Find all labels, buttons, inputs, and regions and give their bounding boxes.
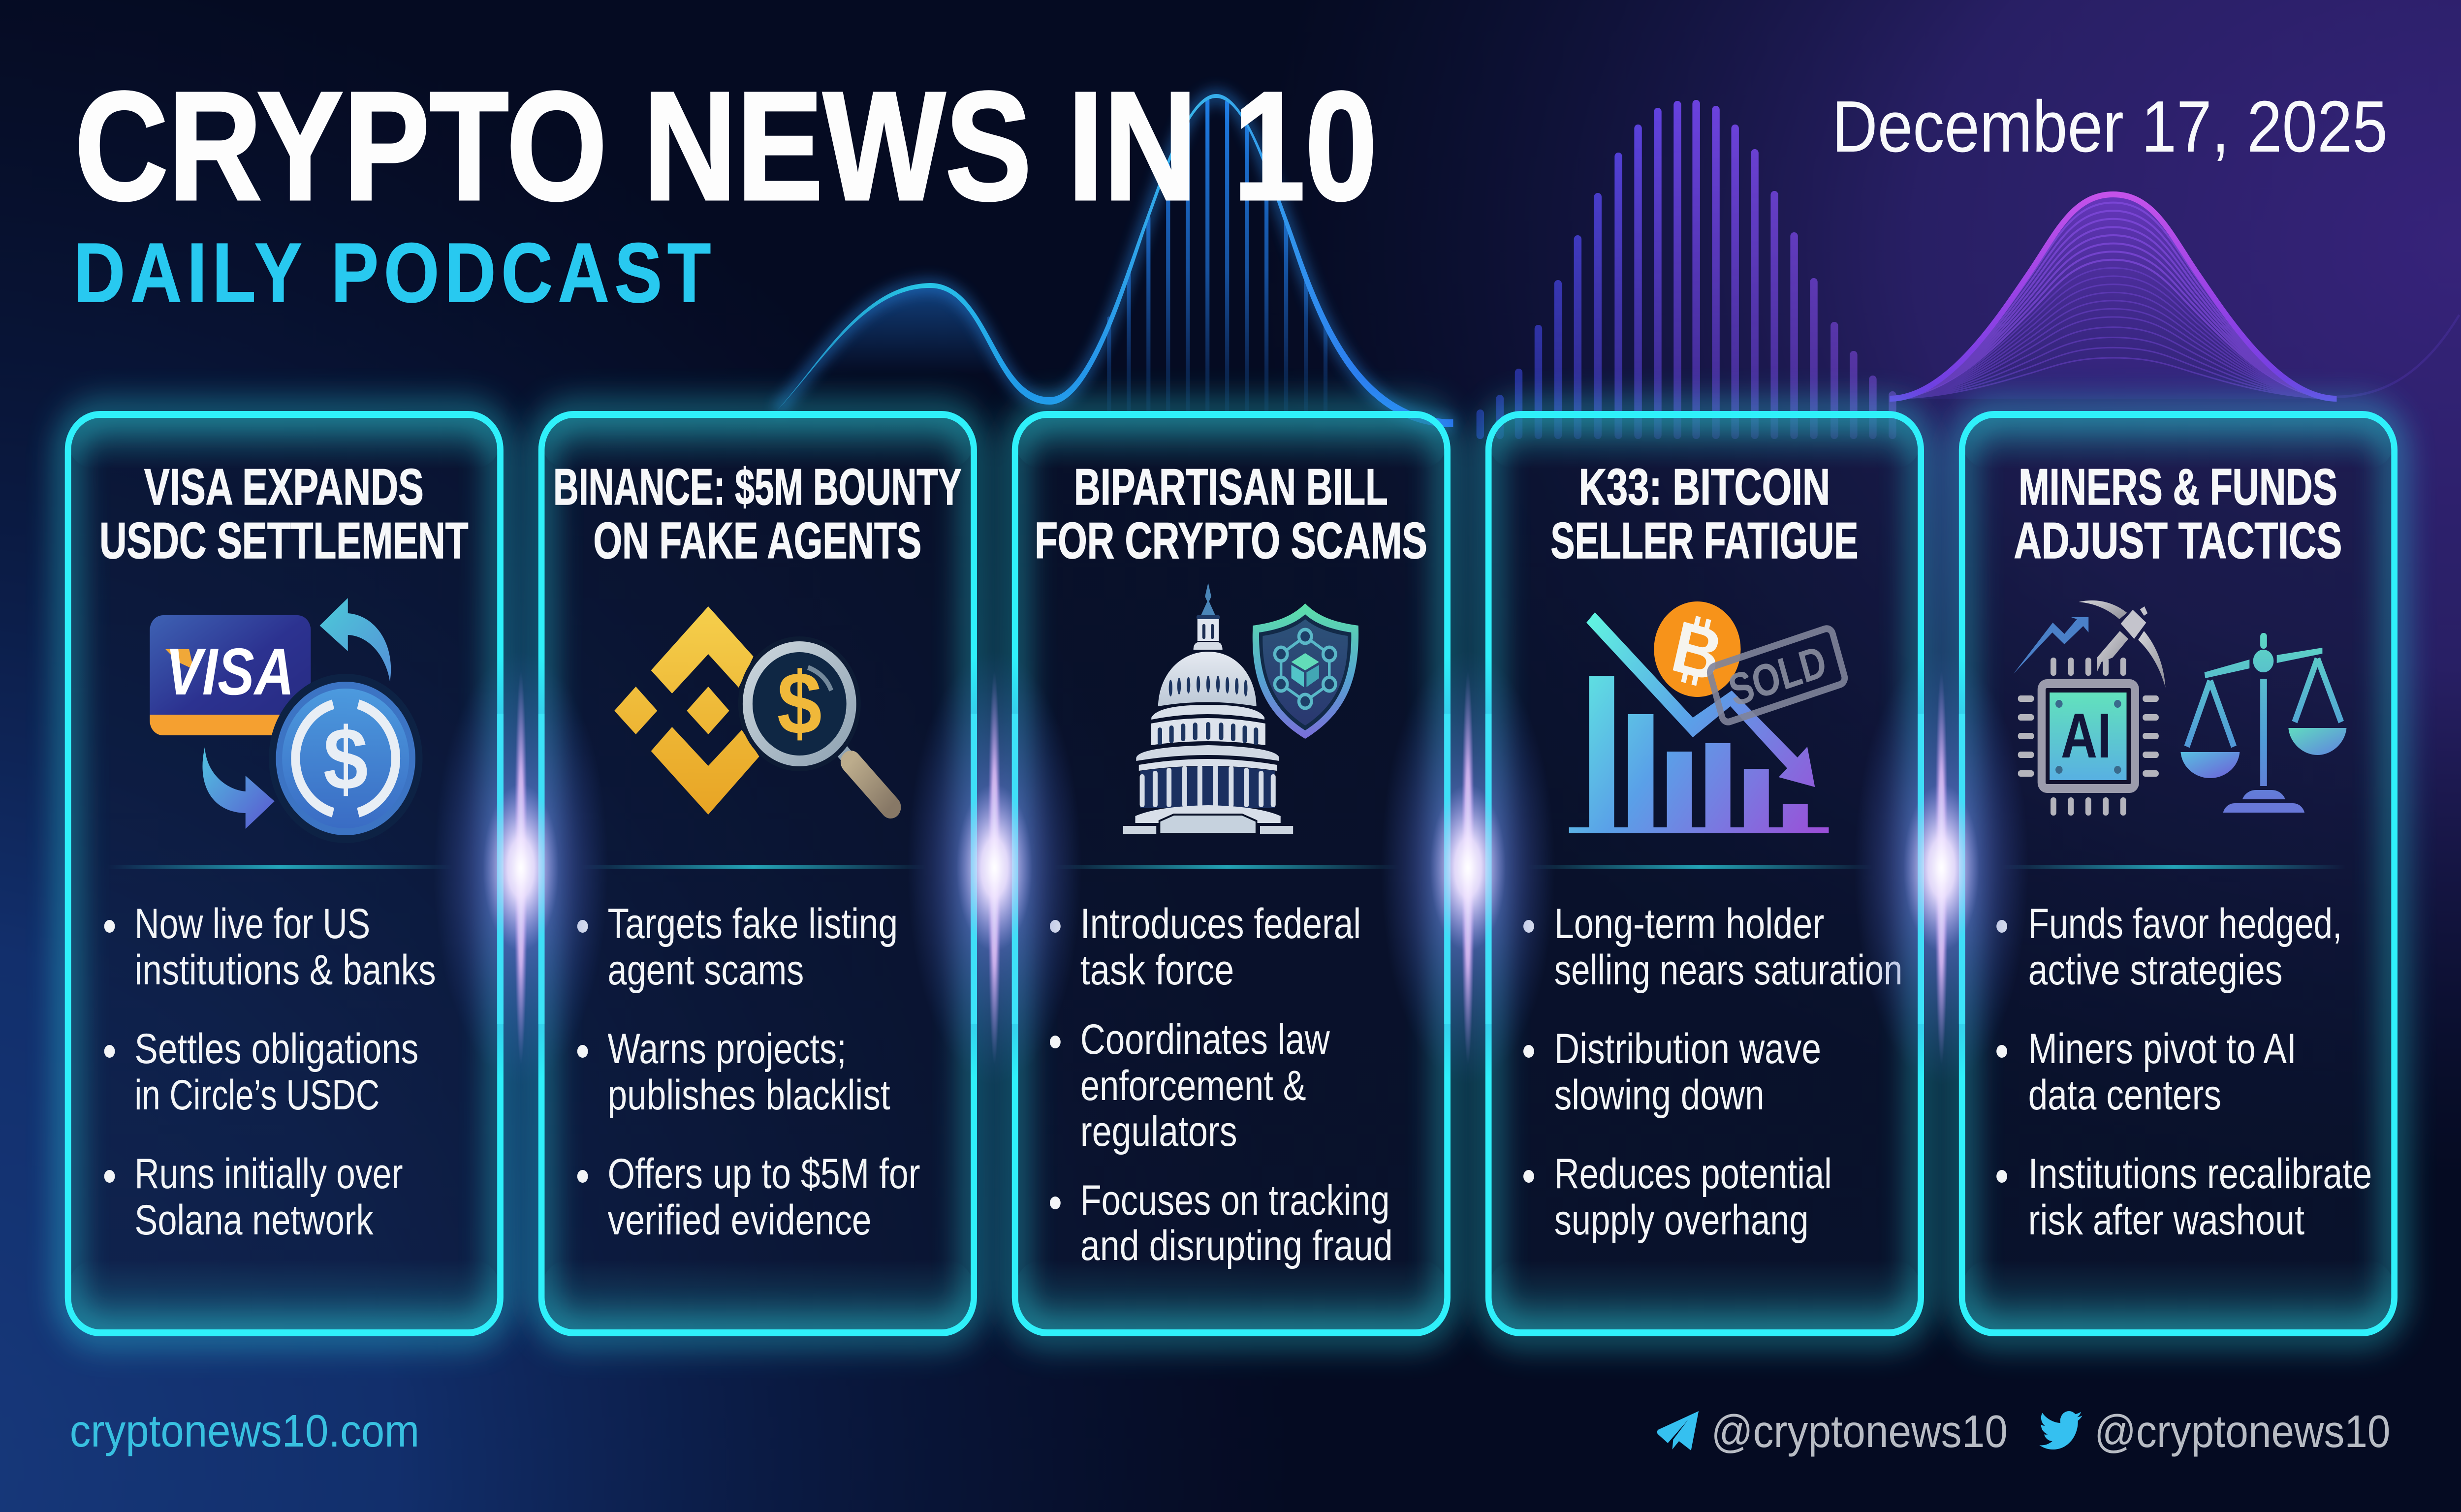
bullet list: Solana network	[134, 1197, 374, 1244]
bullet list: Miners pivot to AI	[2028, 1026, 2297, 1072]
heading: FOR CRYPTO SCAMS	[1035, 512, 1427, 569]
heading: BINANCE: $5M BOUNTY	[553, 459, 962, 516]
divider	[2001, 865, 2346, 869]
panel: Binance bounty	[541, 414, 974, 1333]
divider	[581, 865, 926, 869]
bullet list: and disrupting fraud	[1080, 1223, 1393, 1269]
divider	[107, 865, 452, 869]
website link: cryptonews10.com	[70, 1405, 419, 1456]
bullet list: institutions & banks	[134, 947, 436, 994]
bullet list: Settles obligations	[134, 1026, 418, 1072]
telegram handle: @cryptonews10	[1711, 1406, 2008, 1457]
heading: ON FAKE AGENTS	[593, 512, 921, 569]
heading: BIPARTISAN BILL	[1074, 459, 1388, 516]
heading	[1035, 459, 1427, 569]
bullet list	[1996, 901, 2372, 1244]
divider	[1528, 865, 1873, 869]
icon: AI chip and pickaxe	[2014, 600, 2166, 816]
bullet list: supply overhang	[1554, 1197, 1809, 1244]
heading: USDC SETTLEMENT	[99, 512, 469, 569]
bullet list: Institutions recalibrate	[2028, 1151, 2372, 1197]
bullet list: enforcement &	[1080, 1063, 1306, 1109]
heading: ADJUST TACTICS	[2014, 512, 2342, 569]
date: December 17, 2025	[1832, 86, 2388, 167]
heading: K33: BITCOIN	[1579, 459, 1830, 516]
bullet list: task force	[1080, 947, 1234, 994]
bullet list: Warns projects;	[608, 1026, 847, 1072]
bullet list: regulators	[1080, 1108, 1237, 1155]
bullet list: risk after washout	[2028, 1197, 2304, 1244]
icon: falling bar chart with bitcoin and sold stamp	[1569, 601, 1846, 833]
heading	[99, 459, 469, 569]
heading	[553, 459, 962, 569]
bullet list: Distribution wave	[1554, 1026, 1821, 1072]
icon: Visa card and USDC coin	[150, 598, 422, 843]
panel: Miners and funds	[1962, 414, 2395, 1333]
icon: Visa card and USDC coin: VISA	[165, 635, 294, 709]
subtitle: DAILY PODCAST	[74, 226, 711, 320]
icon: balance scale	[2180, 633, 2346, 813]
bullet list: data centers	[2028, 1072, 2221, 1119]
icon: Visa card and USDC coin: $	[323, 710, 368, 809]
bullet list: Now live for US	[134, 901, 370, 947]
heading: VISA EXPANDS	[144, 459, 424, 516]
bullet list: Long-term holder	[1554, 901, 1824, 947]
waveform: purple vertical bars	[1477, 100, 1896, 439]
bullet list: Coordinates law	[1080, 1016, 1330, 1063]
panel: K33 Bitcoin seller fatigue	[1488, 414, 1921, 1333]
bullet list	[1050, 901, 1393, 1269]
bullet list: active strategies	[2028, 947, 2283, 994]
heading: SELLER FATIGUE	[1550, 512, 1858, 569]
bullet list: slowing down	[1554, 1072, 1765, 1119]
bullet list: selling nears saturation	[1554, 947, 1902, 994]
bullet list: Reduces potential	[1554, 1151, 1832, 1197]
icon: AI chip and pickaxe: AI	[2061, 700, 2112, 771]
twitter handle: @cryptonews10	[2094, 1406, 2390, 1457]
bullet list: Runs initially over	[134, 1151, 403, 1197]
bullet list: verified evidence	[608, 1197, 872, 1244]
icon: Binance logo with magnifier: $	[777, 654, 822, 753]
bullet list: Focuses on tracking	[1080, 1177, 1389, 1224]
bullet list: Introduces federal	[1080, 901, 1361, 947]
icon: falling bar chart with bitcoin and sold stamp: SOLD	[1723, 635, 1831, 716]
bullet list: agent scams	[608, 947, 804, 994]
bullet list	[1523, 901, 1902, 1244]
panel: Visa USDC settlement	[68, 414, 501, 1333]
bullet list	[577, 901, 920, 1244]
bullet list: Targets fake listing	[608, 901, 898, 947]
panel: Bipartisan bill	[1015, 414, 1448, 1333]
light flares between panels	[434, 651, 2029, 1084]
bullet list: publishes blacklist	[608, 1072, 890, 1119]
heading	[2014, 459, 2342, 569]
icon: Binance logo with magnifier	[614, 606, 891, 815]
bullet list: Funds favor hedged,	[2028, 901, 2342, 947]
title: CRYPTO NEWS IN 10	[75, 59, 1377, 232]
icon: falling bar chart with bitcoin and sold stamp: B	[1665, 605, 1730, 697]
waveform: purple contour bell	[1890, 194, 2459, 399]
heading	[1550, 459, 1858, 569]
bullet list: Offers up to $5M for	[608, 1151, 920, 1197]
waveform: blue curve with bars	[777, 94, 1453, 427]
bullet list: in Circle’s USDC	[134, 1072, 379, 1119]
icon: capitol dome and blockchain shield	[1123, 583, 1358, 834]
bullet list	[104, 901, 436, 1244]
heading: MINERS & FUNDS	[2019, 459, 2337, 516]
divider	[1054, 865, 1399, 869]
